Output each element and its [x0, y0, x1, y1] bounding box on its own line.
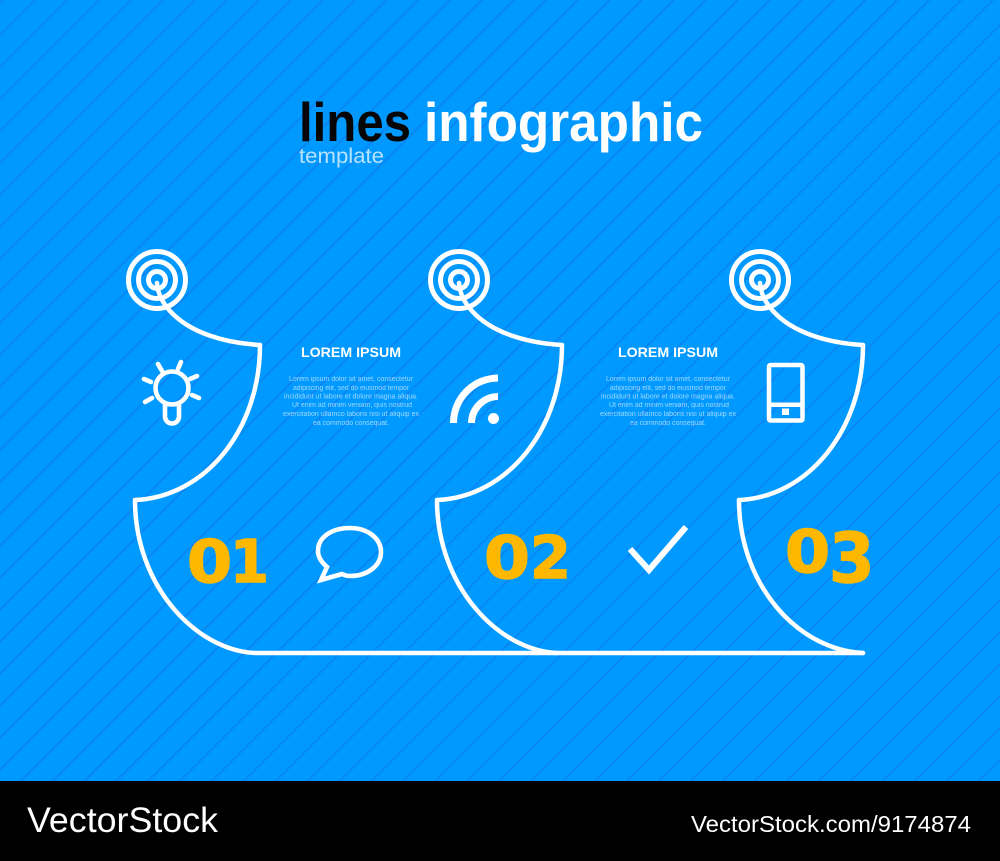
text block: column 2	[600, 344, 736, 427]
text block: column 2: Lorem ipsum dolor sit amet, consectetur	[606, 376, 731, 383]
number 03: 3	[829, 518, 875, 598]
number 03	[785, 517, 875, 598]
text block: column 1: incididunt ut labore et dolore magna aliqua.	[284, 394, 418, 400]
text block: column 1	[283, 344, 419, 427]
title: infographic	[424, 91, 703, 153]
text block: column 2: incididunt ut labore et dolore magna aliqua.	[601, 394, 735, 400]
subtitle: template	[299, 145, 384, 168]
text block: column 2: ea commodo consequat.	[630, 420, 706, 427]
outline: step 2	[430, 252, 562, 653]
text block: column 2: exercitation ullamco laboris nisi ut aliquip ex	[600, 411, 736, 418]
footer bar: VectorStock	[27, 801, 219, 840]
number 01: 0	[187, 527, 232, 596]
title	[299, 91, 703, 153]
text block: column 2: Ut enim ad minim veniam, quis nostrud	[609, 402, 729, 409]
number 03: 0	[785, 517, 830, 586]
text block: column 2: adipiscing elit, sed do eiusmod tempor	[610, 385, 727, 392]
icon: check mark	[630, 527, 686, 570]
icon: speech bubble	[318, 528, 381, 580]
number 01	[187, 527, 269, 596]
number 02: 0	[484, 523, 530, 592]
outline: step 1 and baseline	[128, 252, 863, 653]
number 02	[484, 523, 571, 592]
text block: column 2: LOREM IPSUM	[618, 344, 718, 360]
text block: column 1: ea commodo consequat.	[313, 420, 389, 427]
text block: column 1: LOREM IPSUM	[301, 344, 401, 360]
text block: column 1: Lorem ipsum dolor sit amet, consectetur	[289, 376, 414, 383]
text block: column 1: exercitation ullamco laboris nisi ut aliquip ex	[283, 411, 419, 418]
title: lines	[299, 91, 411, 153]
footer bar: VectorStock.com/9174874	[691, 811, 971, 837]
number 01: 1	[230, 528, 269, 596]
footer bar	[0, 781, 1000, 861]
icon: wifi	[454, 378, 499, 424]
number 02: 2	[530, 523, 571, 592]
text block: column 1: Ut enim ad minim veniam, quis nostrud	[292, 402, 412, 409]
text block: column 1: adipiscing elit, sed do eiusmod tempor	[293, 385, 410, 392]
outline: step 3	[732, 252, 863, 653]
icon: phone	[769, 365, 802, 420]
icon: light bulb	[144, 362, 199, 424]
